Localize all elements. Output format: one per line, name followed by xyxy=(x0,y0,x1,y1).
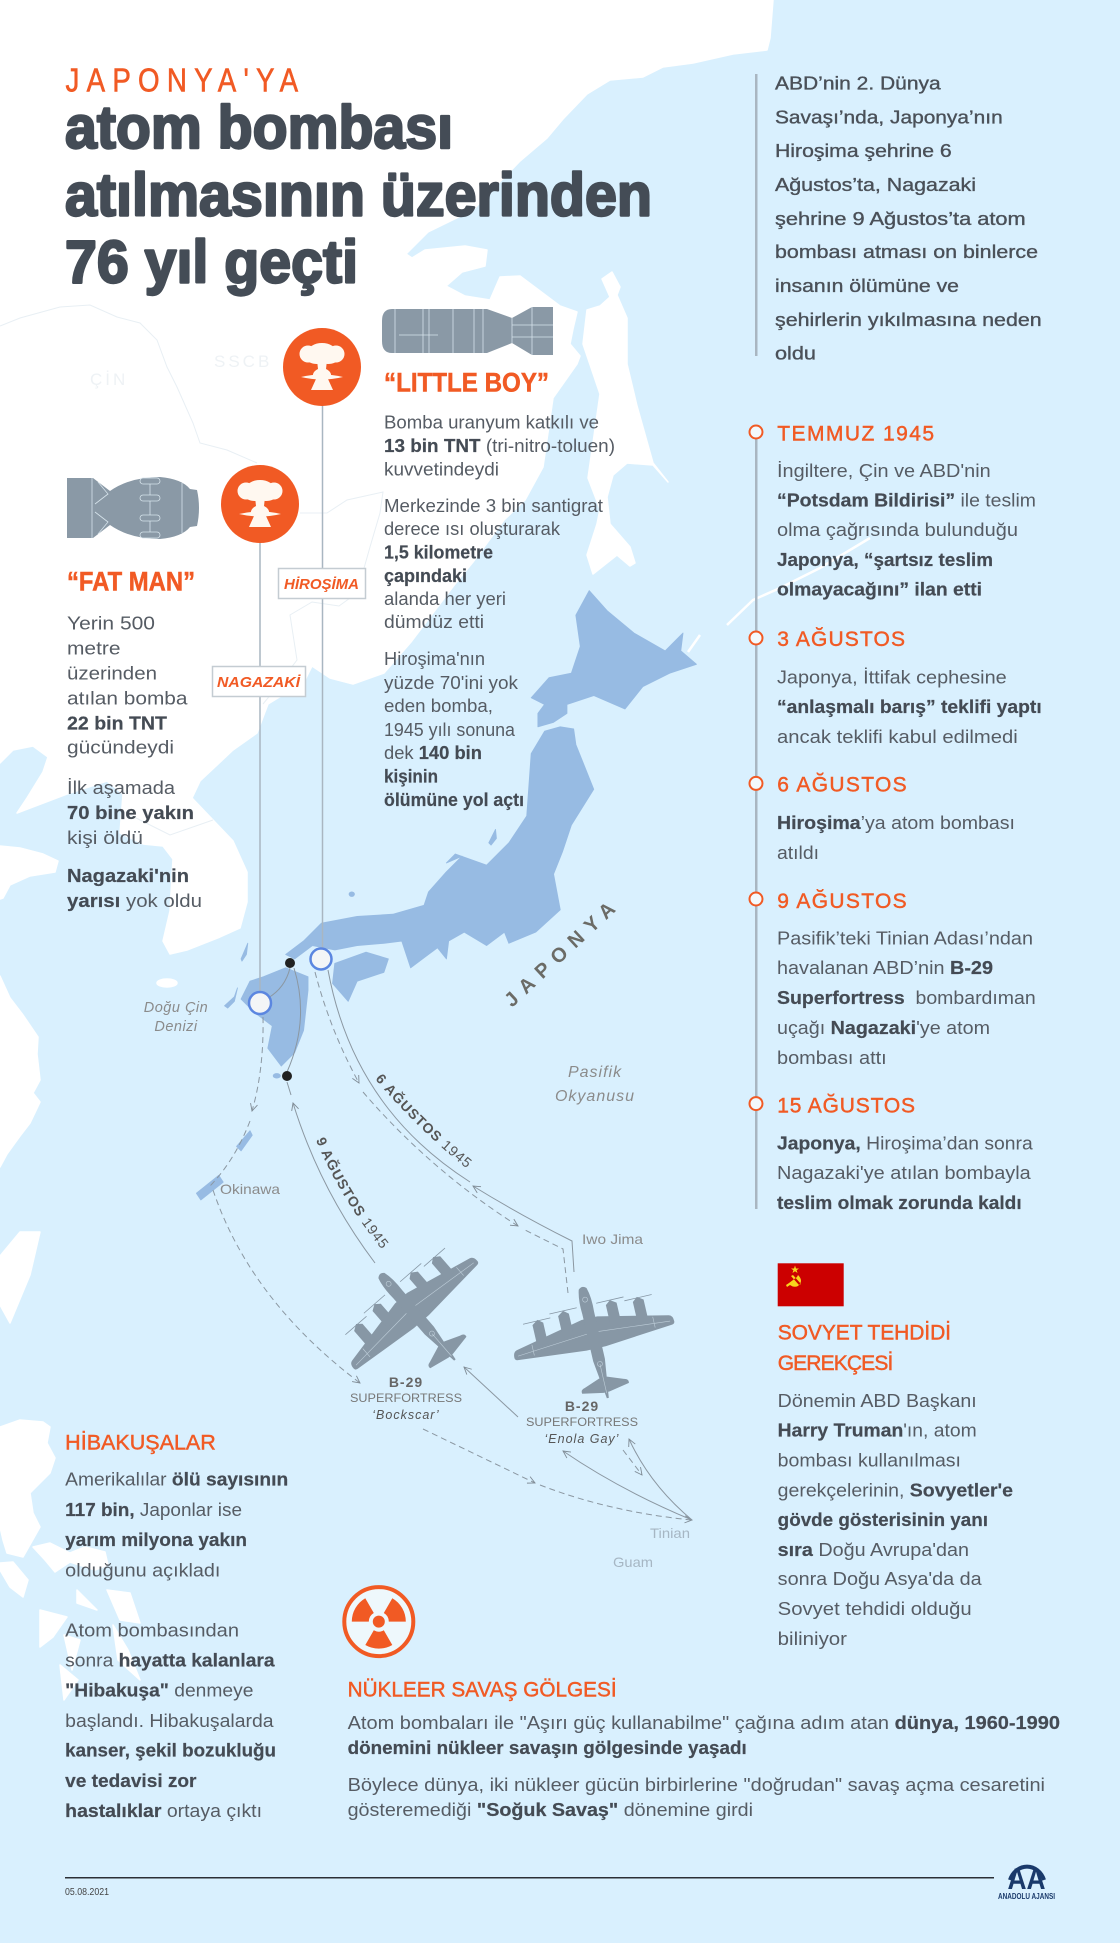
timeline item: 9 Ağustos: Pasifik’teki Tinian Adası’ndan xyxy=(777,928,1033,949)
map labels xyxy=(90,352,690,1570)
intro text block: Ağustos’ta, Nagazaki xyxy=(775,174,976,195)
text: Soviet threat description: biliniyor xyxy=(778,1628,847,1649)
timeline item: 6 Ağustos: Hiroşima’ya atom bombası xyxy=(777,812,1015,833)
text: Hibakuşalar description: "Hibakuşa" denmeye xyxy=(65,1680,253,1701)
text: Hibakuşalar description: Atom bombasından xyxy=(65,1620,239,1640)
intro text block: şehirlerin yıkılmasına neden xyxy=(775,309,1042,330)
heading: Fat Man: “FAT MAN” xyxy=(67,567,195,597)
logo: Anadolu Ajansı: AA xyxy=(1008,1863,1046,1896)
map labels: Iwo Jima xyxy=(582,1231,643,1247)
text: Soviet threat description: Sovyet tehdidi olduğu xyxy=(778,1598,972,1619)
text: Little Boy description: yüzde 70'ini yok xyxy=(384,672,519,693)
heading: Soviet threat: SOVYET TEHDİDİ xyxy=(778,1322,951,1344)
icon: Little Boy bomb xyxy=(382,307,553,355)
plane caption: Bockscar: ‘Bockscar’ xyxy=(372,1408,440,1422)
timeline item: 3 Ağustos: ancak teklifi kabul edilmedi xyxy=(777,726,1018,747)
route date label: 6 Ağustos 1945: 6 AĞUSTOS 1945 xyxy=(376,1074,472,1167)
timeline item: 15 Ağustos: 15 AĞUSTOS xyxy=(777,1095,915,1118)
text: Hibakuşalar description: olduğunu açıkladı xyxy=(65,1560,220,1581)
text: Hibakuşalar description xyxy=(65,1468,288,1821)
intro text block: oldu xyxy=(775,343,816,364)
map labels: Okinawa xyxy=(220,1181,280,1197)
text: Little Boy description: Merkezinde 3 bin santigrat xyxy=(384,495,603,516)
title: 76 yıl geçti xyxy=(65,229,358,296)
timeline item: 6 Ağustos: atıldı xyxy=(777,842,819,863)
text: Little Boy description: Hiroşima'nın xyxy=(384,648,485,669)
text: nuclear war shadow description xyxy=(348,1712,1060,1820)
text: Hibakuşalar description: sonra hayatta kalanlara xyxy=(65,1650,275,1671)
text: Fat Man description: atılan bomba xyxy=(67,688,188,708)
map labels: Denizi xyxy=(154,1019,198,1035)
text: Little Boy description: derece ısı oluşturarak xyxy=(384,518,561,539)
title xyxy=(65,62,652,296)
footer: 05.08.2021 xyxy=(65,1886,109,1898)
timeline item: Temmuz 1945: “Potsdam Bildirisi” ile teslim xyxy=(777,490,1036,511)
text: Fat Man description: 22 bin TNT xyxy=(67,712,168,734)
text: Fat Man description: kişi öldü xyxy=(67,827,143,848)
timeline item: 15 Ağustos: Nagazaki'ye atılan bombayla xyxy=(777,1162,1031,1183)
timeline item: 9 Ağustos: 9 AĞUSTOS xyxy=(777,890,907,913)
plane caption: Enola Gay: ‘Enola Gay’ xyxy=(545,1432,619,1446)
icon: Soviet flag xyxy=(778,1263,844,1306)
heading: Little Boy: “LITTLE BOY” xyxy=(384,368,549,398)
text: Soviet threat description: Dönemin ABD Başkanı xyxy=(778,1390,977,1411)
Japan landmass xyxy=(196,591,696,1200)
text: Little Boy description: alanda her yeri xyxy=(384,588,506,609)
icon: mushroom cloud, Little Boy xyxy=(283,328,361,406)
timeline item: 9 Ağustos: bombası attı xyxy=(777,1047,887,1068)
Hiroshima label: HİROŞİMA xyxy=(284,576,359,593)
text: Fat Man description: yarısı yok oldu xyxy=(67,890,202,911)
text: Little Boy description: Bomba uranyum katkılı ve xyxy=(384,412,599,432)
panel: Little Boy xyxy=(283,307,615,810)
icon: mushroom cloud, Fat Man xyxy=(221,465,299,543)
timeline item: 3 Ağustos xyxy=(750,628,1042,747)
timeline item: Temmuz 1945: olma çağrısında bulunduğu xyxy=(777,519,1018,540)
plane: Enola Gay xyxy=(502,1269,688,1416)
text: Little Boy description xyxy=(384,412,615,810)
timeline item: Temmuz 1945: TEMMUZ 1945 xyxy=(777,423,934,446)
flight routes xyxy=(210,968,692,1520)
text: Little Boy description: ölümüne yol açtı xyxy=(384,789,524,810)
text: Little Boy description: 1,5 kilometre xyxy=(384,542,493,562)
Nagasaki label: NAGAZAKİ xyxy=(217,674,301,691)
timeline item: 9 Ağustos: uçağı Nagazaki 'ye atom xyxy=(777,1017,990,1038)
text: Fat Man description: Yerin 500 xyxy=(67,612,155,634)
Hiroshima label xyxy=(278,568,366,598)
timeline item: Temmuz 1945: olmayacağını” ilan etti xyxy=(777,579,982,600)
text: Soviet threat description: gövde gösterisinin yanı xyxy=(778,1509,988,1530)
panel: timeline xyxy=(750,423,1042,1213)
plane caption: Bockscar: B-29 xyxy=(389,1374,423,1390)
intro text block: şehrine 9 Ağustos’ta atom xyxy=(775,208,1026,229)
title: atom bombası xyxy=(65,94,453,161)
logo: Anadolu Ajansı xyxy=(998,1863,1055,1901)
plane caption: Enola Gay: SUPERFORTRESS xyxy=(526,1415,638,1429)
timeline item: 9 Ağustos: Superfortress bombardıman xyxy=(777,987,1036,1008)
plane: Bockscar xyxy=(318,1220,517,1414)
plane caption: Bockscar: SUPERFORTRESS xyxy=(350,1391,462,1405)
text: Hibakuşalar description: ve tedavisi zor xyxy=(65,1770,196,1791)
timeline item: 3 Ağustos: “anlaşmalı barış” teklifi yaptı xyxy=(777,696,1042,717)
icon: Fat Man bomb xyxy=(67,477,199,539)
intro text block: ABD’nin 2. Dünya xyxy=(775,72,941,94)
text: nuclear war shadow description: Böylece dünya, iki nükleer gücün birbirlerine "doğrudan" savaş açma cesaretini xyxy=(348,1774,1045,1795)
text: Hibakuşalar description: hastalıklar ortaya çıktı xyxy=(65,1800,262,1821)
text: Hibakuşalar description: kanser, şekil bozukluğu xyxy=(65,1740,276,1761)
text: Little Boy description: eden bomba, xyxy=(384,695,493,716)
timeline item: 9 Ağustos: havalanan ABD’nin B-29 xyxy=(777,957,993,978)
text: Little Boy description: 13 bin TNT (tri-nitro-toluen) xyxy=(384,435,615,456)
map labels: Doğu Çin xyxy=(144,1000,208,1016)
heading: Hibakuşalar: HİBAKUŞALAR xyxy=(65,1432,216,1454)
text: Soviet threat description: Harry Truman 'ın, atom xyxy=(778,1419,977,1440)
text: Little Boy description: 1945 yılı sonuna xyxy=(384,719,516,740)
map labels: ÇİN xyxy=(90,370,128,389)
text: Fat Man description: Nagazaki'nin xyxy=(67,865,189,886)
text: Hibakuşalar description: başlandı. Hibakuşalarda xyxy=(65,1710,274,1731)
text: Hibakuşalar description: 117 bin, Japonlar ise xyxy=(65,1499,242,1520)
text: Little Boy description: dek 140 bin xyxy=(384,742,482,763)
text: Fat Man description: üzerinden xyxy=(67,662,157,684)
title: atılmasının üzerinden xyxy=(65,162,652,229)
text: Hibakuşalar description: yarım milyona yakın xyxy=(65,1529,247,1550)
heading: nuclear war shadow: NÜKLEER SAVAŞ GÖLGESİ xyxy=(348,1679,617,1702)
intro text block: Savaşı’nda, Japonya’nın xyxy=(775,106,1003,128)
route date label: 9 Ağustos 1945: 9 AĞUSTOS 1945 xyxy=(316,1138,388,1248)
city marker lines xyxy=(260,404,322,992)
map labels: Tinian xyxy=(650,1525,690,1541)
timeline item: Temmuz 1945 xyxy=(750,423,1036,600)
text: nuclear war shadow description: gösteremediği "Soğuk Savaş" dönemine girdi xyxy=(348,1799,753,1820)
timeline item: Temmuz 1945: Japonya, “şartsız teslim xyxy=(777,549,993,570)
text: Little Boy description: kişinin xyxy=(384,766,438,787)
text: Fat Man description: İlk aşamada xyxy=(67,777,176,798)
text: Fat Man description: 70 bine yakın xyxy=(67,802,194,823)
timeline item: 3 Ağustos: Japonya, İttifak cephesine xyxy=(777,667,1007,688)
timeline item: 15 Ağustos: Japonya, Hiroşima’dan sonra xyxy=(777,1132,1033,1154)
map labels: Pasifik xyxy=(568,1064,622,1081)
intro text block: bombası atması on binlerce xyxy=(775,241,1038,262)
text: Soviet threat description: sonra Doğu Asya'da da xyxy=(778,1568,982,1589)
map labels: Guam xyxy=(613,1554,653,1570)
text: Soviet threat description: bombası kullanılması xyxy=(778,1450,961,1470)
timeline item: 3 Ağustos: 3 AĞUSTOS xyxy=(777,628,905,651)
timeline item: 15 Ağustos xyxy=(750,1095,1033,1213)
city markers and stopover dots xyxy=(249,948,332,1081)
timeline item: 6 Ağustos: 6 AĞUSTOS xyxy=(777,774,907,797)
plane caption: Enola Gay: B-29 xyxy=(565,1398,599,1414)
plane caption: Bockscar xyxy=(350,1374,462,1422)
map labels: Okyanusu xyxy=(555,1088,635,1105)
text: Soviet threat description xyxy=(778,1390,1013,1649)
text: Little Boy description: kuvvetindeydi xyxy=(384,458,499,480)
panel: Hibakuşalar xyxy=(65,1432,288,1821)
text: Little Boy description: dümdüz etti xyxy=(384,611,484,632)
title: JAPONYA'YA xyxy=(66,62,299,99)
text: Hibakuşalar description: Amerikalılar ölü sayısının xyxy=(65,1468,288,1490)
panel: Fat Man xyxy=(67,465,299,911)
text: Fat Man description xyxy=(67,612,202,911)
intro text block: insanın ölümüne ve xyxy=(775,275,959,296)
text: Soviet threat description: gerekçelerinin, Sovyetler'e xyxy=(778,1480,1013,1500)
text: Fat Man description: gücündeydi xyxy=(67,736,174,758)
map labels: SSCB xyxy=(214,352,272,371)
text: nuclear war shadow description: dönemini nükleer savaşın gölgesinde yaşadı xyxy=(348,1737,747,1758)
timeline item: 15 Ağustos: teslim olmak zorunda kaldı xyxy=(777,1192,1022,1213)
text: Fat Man description: metre xyxy=(67,638,120,658)
map labels: JAPONYA xyxy=(500,893,626,1012)
timeline item: Temmuz 1945: İngiltere, Çin ve ABD'nin xyxy=(777,460,991,481)
intro text block xyxy=(755,72,1042,364)
timeline item: 9 Ağustos xyxy=(750,890,1036,1068)
timeline item: 6 Ağustos xyxy=(750,774,1015,863)
plane caption: Enola Gay xyxy=(526,1398,638,1446)
panel: Soviet threat: GEREKÇESİ xyxy=(778,1352,893,1375)
text: Soviet threat description: sıra Doğu Avrupa'dan xyxy=(778,1539,969,1560)
text: nuclear war shadow description: Atom bombaları ile "Aşırı güç kullanabilme" çağına adım atan dünya, 1960-1990 xyxy=(348,1712,1060,1733)
panel: Soviet threat xyxy=(778,1263,1013,1649)
intro text block: Hiroşima şehrine 6 xyxy=(775,140,952,161)
panel: nuclear war shadow xyxy=(344,1587,1060,1820)
text: Little Boy description: çapındaki xyxy=(384,565,467,586)
Nagasaki label xyxy=(212,666,306,696)
icon: radiation xyxy=(344,1587,413,1656)
logo: Anadolu Ajansı: ANADOLU AJANSI xyxy=(998,1891,1055,1901)
